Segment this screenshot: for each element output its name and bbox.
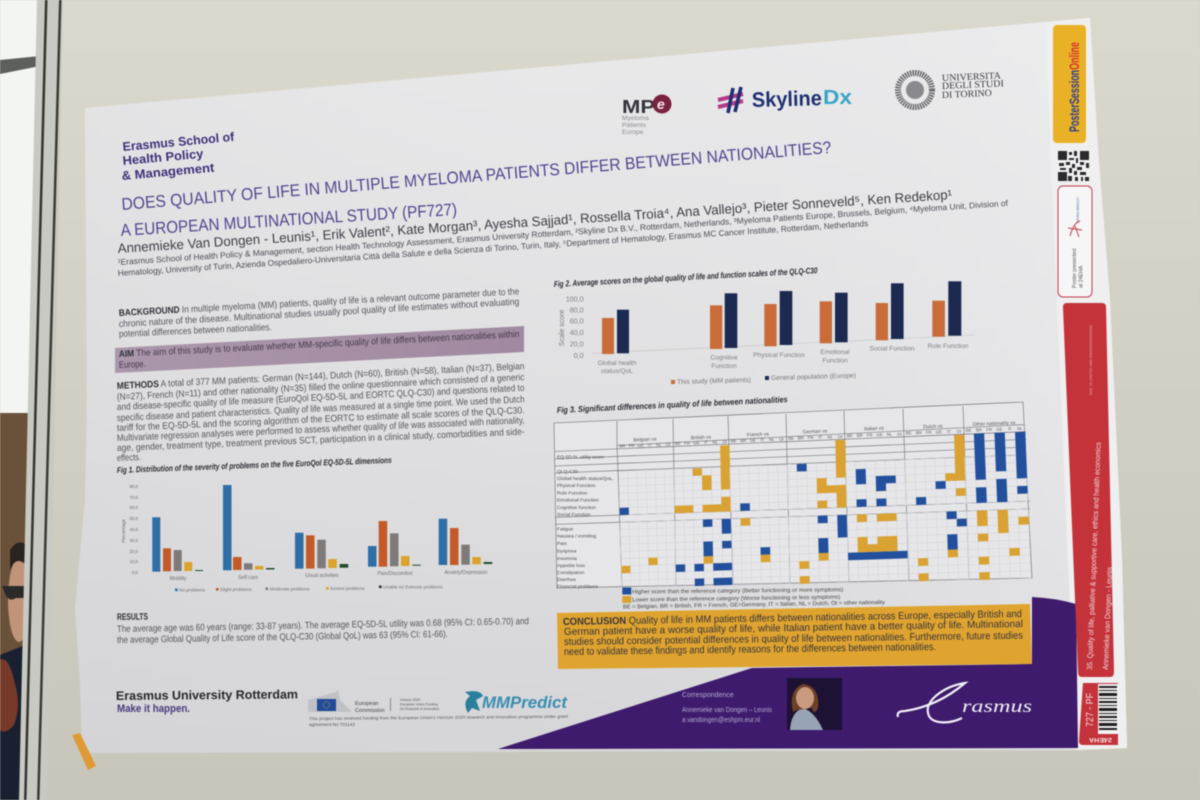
y axis labels: 60,0 <box>129 505 139 510</box>
logo: Università degli Studi di Torino: DEGLI STUDI <box>942 78 1004 92</box>
authors: Annemieke Van Dongen - Leunis¹, Erik Valent², Kate Morgan³, Ayesha Sajjad¹, Rossella Troia⁴, Ana Vallejo³, Pieter Sonneveld⁵, Ken Redekop¹ <box>117 187 953 256</box>
funding statement <box>309 714 569 727</box>
aim band: AIM The aim of this study is to evaluate whether MM-specific quality of life differs between nationalities within <box>119 328 520 359</box>
orange tape <box>72 733 96 770</box>
column codes: Italian: BR <box>857 433 863 438</box>
y axis labels: 50,0 <box>129 516 139 521</box>
column codes: Other: FR <box>986 427 992 432</box>
person at left edge <box>0 542 30 800</box>
QR code <box>1058 151 1089 181</box>
figure 3 legend: BE = Belgian, BR = British, FR = French, GE=Germany, IT = Italian, NL = Dutch, Ot = other nationality <box>623 600 885 610</box>
logo: Università degli Studi di Torino: DI TORINO <box>942 88 992 101</box>
y axis labels: 0,0 <box>574 351 584 360</box>
Erasmus signature logo: rasmus <box>962 696 1032 716</box>
y axis labels: Percentage <box>121 519 126 543</box>
bars: this study <box>602 301 945 354</box>
footer: Erasmus University Rotterdam <box>116 687 298 715</box>
y axis labels: Scale score <box>559 310 566 346</box>
portrait photo <box>787 678 842 730</box>
row labels: EQ-5D-5L utility score <box>557 454 604 460</box>
category labels: Social Function <box>869 346 915 352</box>
column codes: German: FR <box>808 435 814 440</box>
row labels: Role Function <box>557 490 587 496</box>
category labels: Pain/Discomfort <box>377 571 413 577</box>
column codes: Belgian: Ot <box>666 442 671 447</box>
methods text block: Multivariate regression analyses were performed to assess whether quality of life was associated with nationality, <box>117 414 525 443</box>
logo: Myeloma Patients Europe: Patients <box>622 122 647 129</box>
title: DOES QUALITY OF LIFE IN MULTIPLE MYELOMA PATIENTS DIFFER BETWEEN NATIONALITIES? <box>121 138 832 214</box>
column codes: Belgian: GE <box>637 443 644 448</box>
funding statement: This project has received funding from the European Union's Horizon 2020 research and innovation programme under grant <box>309 714 569 721</box>
methods text block: age, gender, treatment type, treatment previous SCT, participation in a clinical study, comorbidities and side- <box>117 426 525 453</box>
subtitle: A EUROPEAN MULTINATIONAL STUDY (PF727) <box>120 200 458 240</box>
column codes: French <box>731 437 785 443</box>
methods text block: and disease-specific quality of life measure (EuroQol EQ-5D-5L and EORTC QLQ-C30) and questions related to <box>117 382 525 412</box>
correspondence text: Correspondence <box>682 692 734 699</box>
Poster Session Online badge: PosterSessionOnline <box>1067 42 1082 132</box>
column codes: Belgian: NL <box>656 442 662 447</box>
row labels <box>557 454 614 590</box>
row labels: Pain <box>557 541 567 547</box>
group headers: Other nationality vs <box>972 420 1016 428</box>
column codes: Italian: BE <box>847 433 853 438</box>
group headers: German vs <box>803 428 828 436</box>
affiliations: Hematology, University of Turin, Azienda Ospedaliero-Universitaria Città della Salute e della Scienza di Torino, Turin, Italy, ⁵Department of Hematology, Erasmus MC Cancer Institute, Rotterdam, Netherlands <box>117 218 868 278</box>
row labels: Dyspnea <box>557 548 577 554</box>
column codes: Italian: NL <box>887 432 893 437</box>
column codes: British: Ot <box>722 439 728 444</box>
conclusion box: CONCLUSION Quality of life in MM patients differs between nationalities across Europe, especially British and <box>563 609 1022 628</box>
column codes: German <box>788 434 843 441</box>
results text block: The average age was 60 years (range: 33-87 years). The average EQ-5D-5L utility was 0.68 (95% CI: 0.65-0.70) and <box>117 615 529 634</box>
column codes: Other <box>966 426 1023 433</box>
correspondence text <box>682 692 772 724</box>
y axis labels: 20,0 <box>129 549 139 554</box>
column codes: Italian: FR <box>867 432 873 438</box>
methods text block: tariff for the EQ-5D-5L and the scoring algorithm of the EORTC to estimate all scale scores of the QLQ-C30. <box>117 404 525 433</box>
column codes: German: BE <box>788 436 794 441</box>
group: German vs <box>786 440 849 584</box>
category labels: Anxiety/Depression <box>444 570 488 576</box>
methods text block: specific disease and patient characteristics. Quality of life was measured at a single time point. We used the Dutch <box>117 393 525 423</box>
figure 3 legend <box>622 587 885 610</box>
bars: severe problems <box>184 556 481 571</box>
column codes: Dutch: IT <box>947 429 951 434</box>
legend: General population (Europe) <box>771 372 856 382</box>
column codes: British: BE <box>675 441 681 446</box>
column codes: Dutch <box>906 429 962 436</box>
conclusion box: need to validate these findings and identify reasons for the differences between nationalities. <box>564 642 936 658</box>
column codes: Dutch: GE <box>936 429 942 435</box>
results text block <box>117 611 529 645</box>
group headers: Belgian vs <box>633 436 657 443</box>
affiliations: ¹Erasmus School of Health Policy & Management, section Health Technology Assessment, Erasmus University Rotterdam, ²Skyline Dx B.V., Rotterdam, Netherlands, ³Myeloma Patients Europe, Brussels, Belgium, ⁴Myeloma Unit, Division of <box>117 198 1009 267</box>
logo: Erasmus School of Health Policy and Management <box>121 130 236 183</box>
barcode tag: 727 - PF <box>1084 693 1096 727</box>
logo: Erasmus School of Health Policy and Management: & Management <box>121 161 216 183</box>
column codes: Other: BE <box>966 428 972 433</box>
category labels: Usual activities <box>305 573 339 579</box>
category labels: Self-care <box>238 575 258 581</box>
legend: Slight problems <box>220 587 252 592</box>
group headers: Italian vs <box>864 426 884 432</box>
Poster Session Online badge <box>1053 25 1086 143</box>
column codes: German: NL <box>827 434 834 440</box>
logo: European Commission: Horizon 2020 <box>400 698 420 702</box>
correspondence text: a.vandongen@eshpm.eur.nl <box>682 717 760 724</box>
column codes: Belgian: IT <box>648 442 652 448</box>
logo: Erasmus School of Health Policy and Management: Erasmus School of <box>122 130 236 154</box>
barcode tag <box>1079 683 1118 745</box>
background text block: BACKGROUND In multiple myeloma (MM) patients, quality of life is a relevant outcome parameter due to the <box>119 285 520 318</box>
methods text block: effects. <box>117 451 141 463</box>
red topic bar: 35. Quality of life, palliative & supportive care, ethics and health economics <box>1085 442 1103 670</box>
column codes: Italian <box>847 431 903 438</box>
figure 3 legend: Lower score than the reference category (Worse functioning or less symptoms) <box>632 595 840 603</box>
category labels: Mobility <box>170 576 187 582</box>
row labels: Insomnia <box>557 556 577 562</box>
footer: Erasmus University Rotterdam: Make it happen. <box>117 703 190 715</box>
EHA presentation box <box>1058 186 1092 297</box>
results text block: RESULTS <box>117 611 148 622</box>
column codes: Dutch: FR <box>926 430 932 435</box>
logo: European Commission <box>308 690 439 714</box>
EHA presentation box: at 24EHA <box>1078 265 1084 288</box>
bars: no problems <box>152 485 447 572</box>
column codes: Dutch: BE <box>906 430 912 436</box>
y axis labels: 20,0 <box>570 340 584 348</box>
column codes: French: IT <box>760 437 765 442</box>
bars: general population <box>617 281 961 353</box>
methods text block: METHODS A total of 377 MM patients: German (N=144), Dutch (N=60), British (N=58), Italian (N=37), Belgian <box>117 360 525 391</box>
row labels: Appetite loss <box>557 563 586 569</box>
row labels: Nausea / vomiting <box>557 534 596 540</box>
category labels: status/QoL <box>601 368 633 375</box>
column codes: Belgian: FR <box>629 443 635 448</box>
logo: Università degli Studi di Torino <box>898 70 1004 107</box>
y axis labels: 60,0 <box>570 316 584 326</box>
red topic bar: DOI: 10.1097/01.HS9.0000000000000000 <box>1089 325 1093 395</box>
bars: moderate problems <box>174 533 470 571</box>
logo: MMPredict: MMPredict <box>482 693 568 712</box>
methods text block <box>117 360 525 463</box>
logo: SkylineDx: Skyline <box>752 87 822 112</box>
logo: European Commission: European <box>355 701 378 707</box>
group headers <box>633 420 1016 443</box>
column codes: Other: GE <box>996 427 1003 432</box>
red topic bar: Annemieke van Dongen - Leunis <box>1101 567 1114 670</box>
conclusion box: German patient have a worse quality of life, while Italian patient have a better quality of life. Multinational <box>564 619 1023 638</box>
logo: Myeloma Patients Europe: e <box>657 96 665 112</box>
bar chart: figure 1 <box>121 484 492 592</box>
logo: European Commission: Commission <box>355 708 385 714</box>
column codes: Other: BR <box>976 427 982 432</box>
figure 3 title: Fig 3. Significant differences in quality of life between nationalities <box>557 394 788 415</box>
group: French vs <box>730 465 790 585</box>
group: Dutch vs <box>904 435 969 582</box>
footer: Erasmus University Rotterdam: Erasmus University Rotterdam <box>116 687 298 703</box>
background text block: potential differences between nationalities. <box>119 321 272 339</box>
funding statement: agreement No 701143 <box>309 722 356 727</box>
table frame and lines <box>554 402 1032 588</box>
group: Belgian vs <box>619 470 677 588</box>
column codes: German: BR <box>798 435 804 441</box>
column codes: Dutch: Ot <box>956 429 962 434</box>
results text block: the average Global Quality of Life score of the QLQ-C30 (Global QoL) was 63 (95% CI: 61-66). <box>117 628 448 645</box>
group: Italian vs <box>846 460 908 583</box>
EHA presentation box: Poster presented <box>1072 248 1078 288</box>
conclusion box <box>557 604 1032 669</box>
column codes: British: FR <box>684 440 690 446</box>
legend: Severe problems <box>330 586 365 591</box>
column codes: British: NL <box>712 440 719 445</box>
column codes: Belgian: BR <box>619 443 626 449</box>
y axis labels: 80,0 <box>129 484 139 489</box>
column codes: British: IT <box>704 440 708 445</box>
group headers: British vs <box>691 435 712 441</box>
conclusion box: studies should consider potential differences in quality of life between nationalities. Furthermore, future studies <box>564 631 1023 648</box>
row labels: Physical Function <box>557 483 596 489</box>
column codes: Italian: GE <box>876 432 883 437</box>
aim band <box>115 326 524 373</box>
Erasmus signature logo <box>898 683 1032 722</box>
barcode tag: 24EHA <box>1089 736 1112 743</box>
column codes: Dutch: BR <box>916 430 922 435</box>
category labels: Function <box>822 358 848 364</box>
row labels: Emotional Function <box>557 498 599 504</box>
category labels: Global health <box>598 360 637 367</box>
column codes: German: IT <box>818 435 823 440</box>
y axis labels: 40,0 <box>570 328 584 337</box>
bars: extreme problems <box>195 562 492 571</box>
column codes: Other: IT <box>1008 426 1012 431</box>
column codes: British <box>675 439 728 446</box>
red topic bar <box>1063 303 1114 677</box>
logo: SkylineDx: Dx <box>823 87 852 109</box>
legend: No problems <box>179 588 206 592</box>
logo: Erasmus School of Health Policy and Management: Health Policy <box>122 147 204 168</box>
row labels: Financial problems <box>557 584 599 590</box>
logo: Università degli Studi di Torino: UNIVERSITA <box>942 70 1001 84</box>
column codes: French: NL <box>769 437 775 442</box>
column codes: Italian: Ot <box>897 431 903 437</box>
bar chart: figure 2 <box>559 281 975 386</box>
group headers: Dutch vs <box>923 424 943 430</box>
y axis labels: 70,0 <box>129 495 139 500</box>
figure 3 legend: Higher score than the reference category (Better functioning or more symptoms) <box>632 587 843 595</box>
y axis labels: 0,0 <box>132 570 139 575</box>
methods text block: (N=27), French (N=11) and other nationality (N=35) filled the online questionnaire which consisted of a generic <box>117 371 525 402</box>
y axis labels: 40,0 <box>129 527 139 532</box>
logo: SkylineDx <box>718 87 852 113</box>
column codes: Belgian <box>619 442 671 449</box>
y axis labels: 80,0 <box>570 306 584 314</box>
row labels: Global health status/QoL. <box>557 476 614 482</box>
figure 2 title: Fig 2. Average scores on the global quality of life and function scales of the QLQ-C30 <box>554 265 818 289</box>
EHA presentation box: EUROPEAN HEMATOLOGY <box>1075 197 1080 223</box>
y axis labels: 10,0 <box>129 559 139 564</box>
group: British vs <box>673 445 732 587</box>
y axis labels <box>559 294 584 360</box>
legend <box>175 584 443 592</box>
category labels <box>598 343 969 375</box>
row labels: QLQ-C30 <box>557 469 578 475</box>
row labels: Diarrhea <box>557 577 576 583</box>
category labels: Role Function <box>928 343 969 350</box>
logo: European Commission: European Union Funding <box>400 702 438 706</box>
window and brick wall at left <box>0 0 45 800</box>
figure 1 title: Fig 1. Distribution of the severity of problems on the five EuroQol EQ-5D-5L dimensions <box>117 455 392 475</box>
table: figure 3 significance matrix <box>554 402 1032 590</box>
row labels: Fatigue <box>557 526 574 532</box>
window frame <box>19 0 63 800</box>
logo: Myeloma Patients Europe: Europe <box>622 129 644 136</box>
column codes: German: Ot <box>838 434 843 439</box>
category labels: Cognitive <box>710 354 738 362</box>
category labels: Physical Function <box>753 352 805 359</box>
logo: Myeloma Patients Europe <box>622 94 672 136</box>
row labels: Constipation <box>557 570 584 576</box>
y axis labels: 30,0 <box>129 538 139 543</box>
category labels: Function <box>711 363 737 370</box>
logo: Myeloma Patients Europe: Myeloma <box>622 115 649 122</box>
column codes: French: BE <box>731 438 737 443</box>
category labels <box>170 570 488 582</box>
legend <box>671 372 856 386</box>
row labels: Social Function <box>557 512 591 518</box>
column codes: British: GE <box>693 440 700 445</box>
purple footer shape <box>498 597 1078 749</box>
y axis labels <box>121 484 139 575</box>
column codes: Other: NL <box>1017 426 1023 431</box>
background text block <box>118 285 520 339</box>
row labels: Cognitive function <box>557 505 596 511</box>
category labels: Emotional <box>820 349 850 356</box>
logo: European Commission: for Research & Innovation <box>400 707 439 711</box>
bars: slight problems <box>163 521 458 571</box>
logo: Myeloma Patients Europe: MP <box>622 97 655 117</box>
group headers: French vs <box>747 432 770 438</box>
legend: Unable to/ Extreme problems <box>383 584 443 590</box>
group: Other nationality vs <box>964 432 1031 580</box>
y axis labels: 100,0 <box>566 294 584 304</box>
legend: This study (MM patients) <box>677 377 751 386</box>
column codes: French: Ot <box>779 437 785 442</box>
correspondence text: Annemieke van Dongen – Leunis <box>682 707 772 714</box>
background text block: chronic nature of the disease. Multinational studies usually pool quality of life estimates without evaluating <box>118 296 519 329</box>
column codes: French: BR <box>740 438 746 443</box>
legend: Moderate problems <box>270 586 310 592</box>
aim band: Europe. <box>119 358 146 370</box>
column codes: French: GE <box>750 438 756 443</box>
